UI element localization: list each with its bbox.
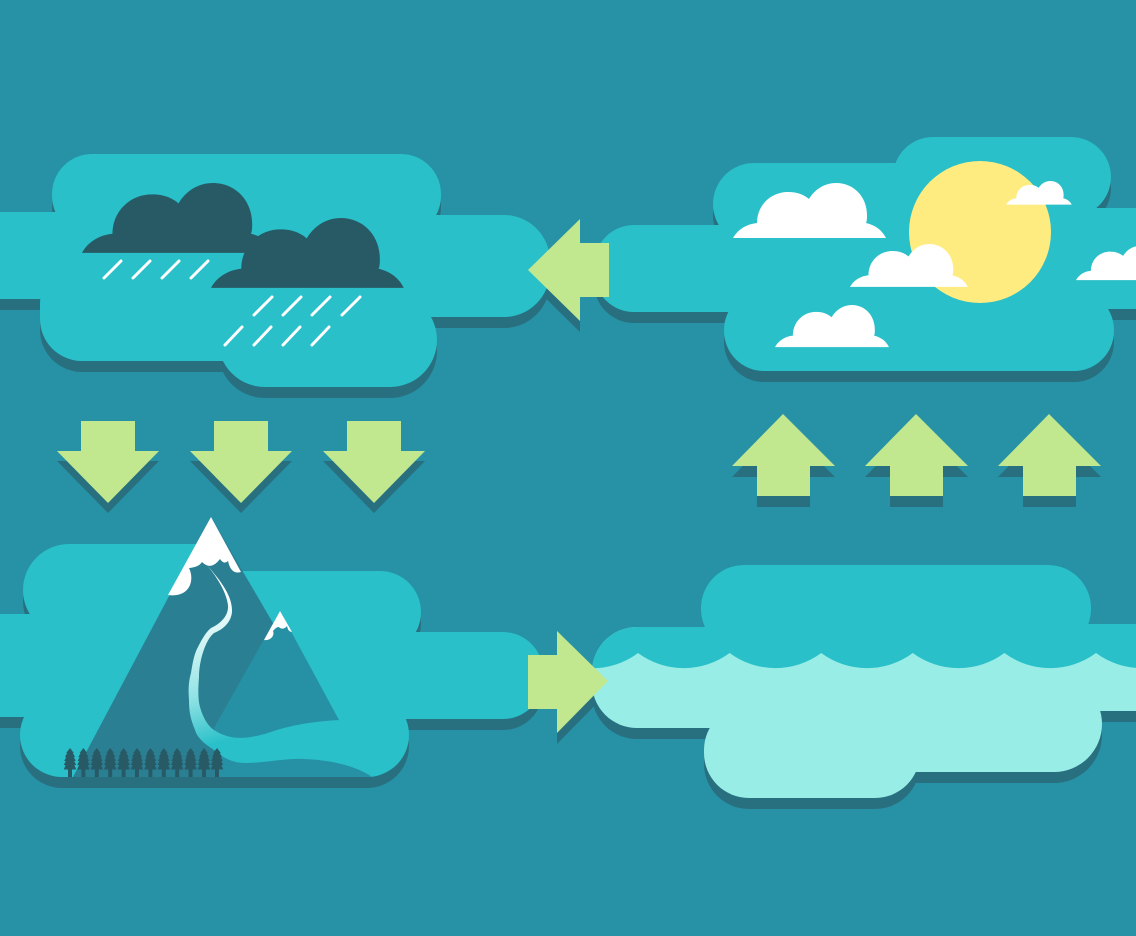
small mountain xyxy=(214,611,372,777)
white clouds xyxy=(733,181,1136,347)
waves xyxy=(592,624,1136,668)
mountain panel body xyxy=(0,544,543,777)
arrows: down (rain) xyxy=(57,421,425,513)
big mountain xyxy=(73,517,363,777)
mountain panel shadow xyxy=(0,555,543,788)
sun xyxy=(909,161,1051,303)
arrows: up (evaporation) xyxy=(732,414,1101,507)
rain drops xyxy=(104,261,360,345)
arrow: right from mountains to ocean xyxy=(528,631,608,733)
arrow: left from sun to rain xyxy=(528,219,609,321)
panel: rain clouds xyxy=(0,154,550,398)
river xyxy=(189,565,372,777)
up arrow shadows xyxy=(732,425,1101,507)
panel: mountains xyxy=(0,517,543,788)
up arrows xyxy=(732,414,1101,496)
dark rain cloud right xyxy=(211,218,404,288)
down arrow shadows xyxy=(57,461,425,513)
dark rain cloud left xyxy=(82,183,276,253)
panel: ocean xyxy=(546,565,1136,809)
ocean water xyxy=(592,624,1136,798)
sun panel shadow xyxy=(594,148,1136,382)
rain panel body xyxy=(0,154,550,387)
small mountain snow xyxy=(264,611,292,640)
sun panel body xyxy=(594,137,1136,371)
rain panel shadow xyxy=(0,165,550,398)
ocean panel shadow xyxy=(592,635,1136,809)
shadow: horizontal arrows xyxy=(528,230,608,744)
panel: sun and clouds xyxy=(594,137,1136,382)
big mountain snow xyxy=(168,517,241,595)
water cycle illustration xyxy=(0,137,1136,809)
trees xyxy=(64,748,223,777)
down arrows xyxy=(57,421,425,503)
ocean upper sky xyxy=(701,565,1091,652)
